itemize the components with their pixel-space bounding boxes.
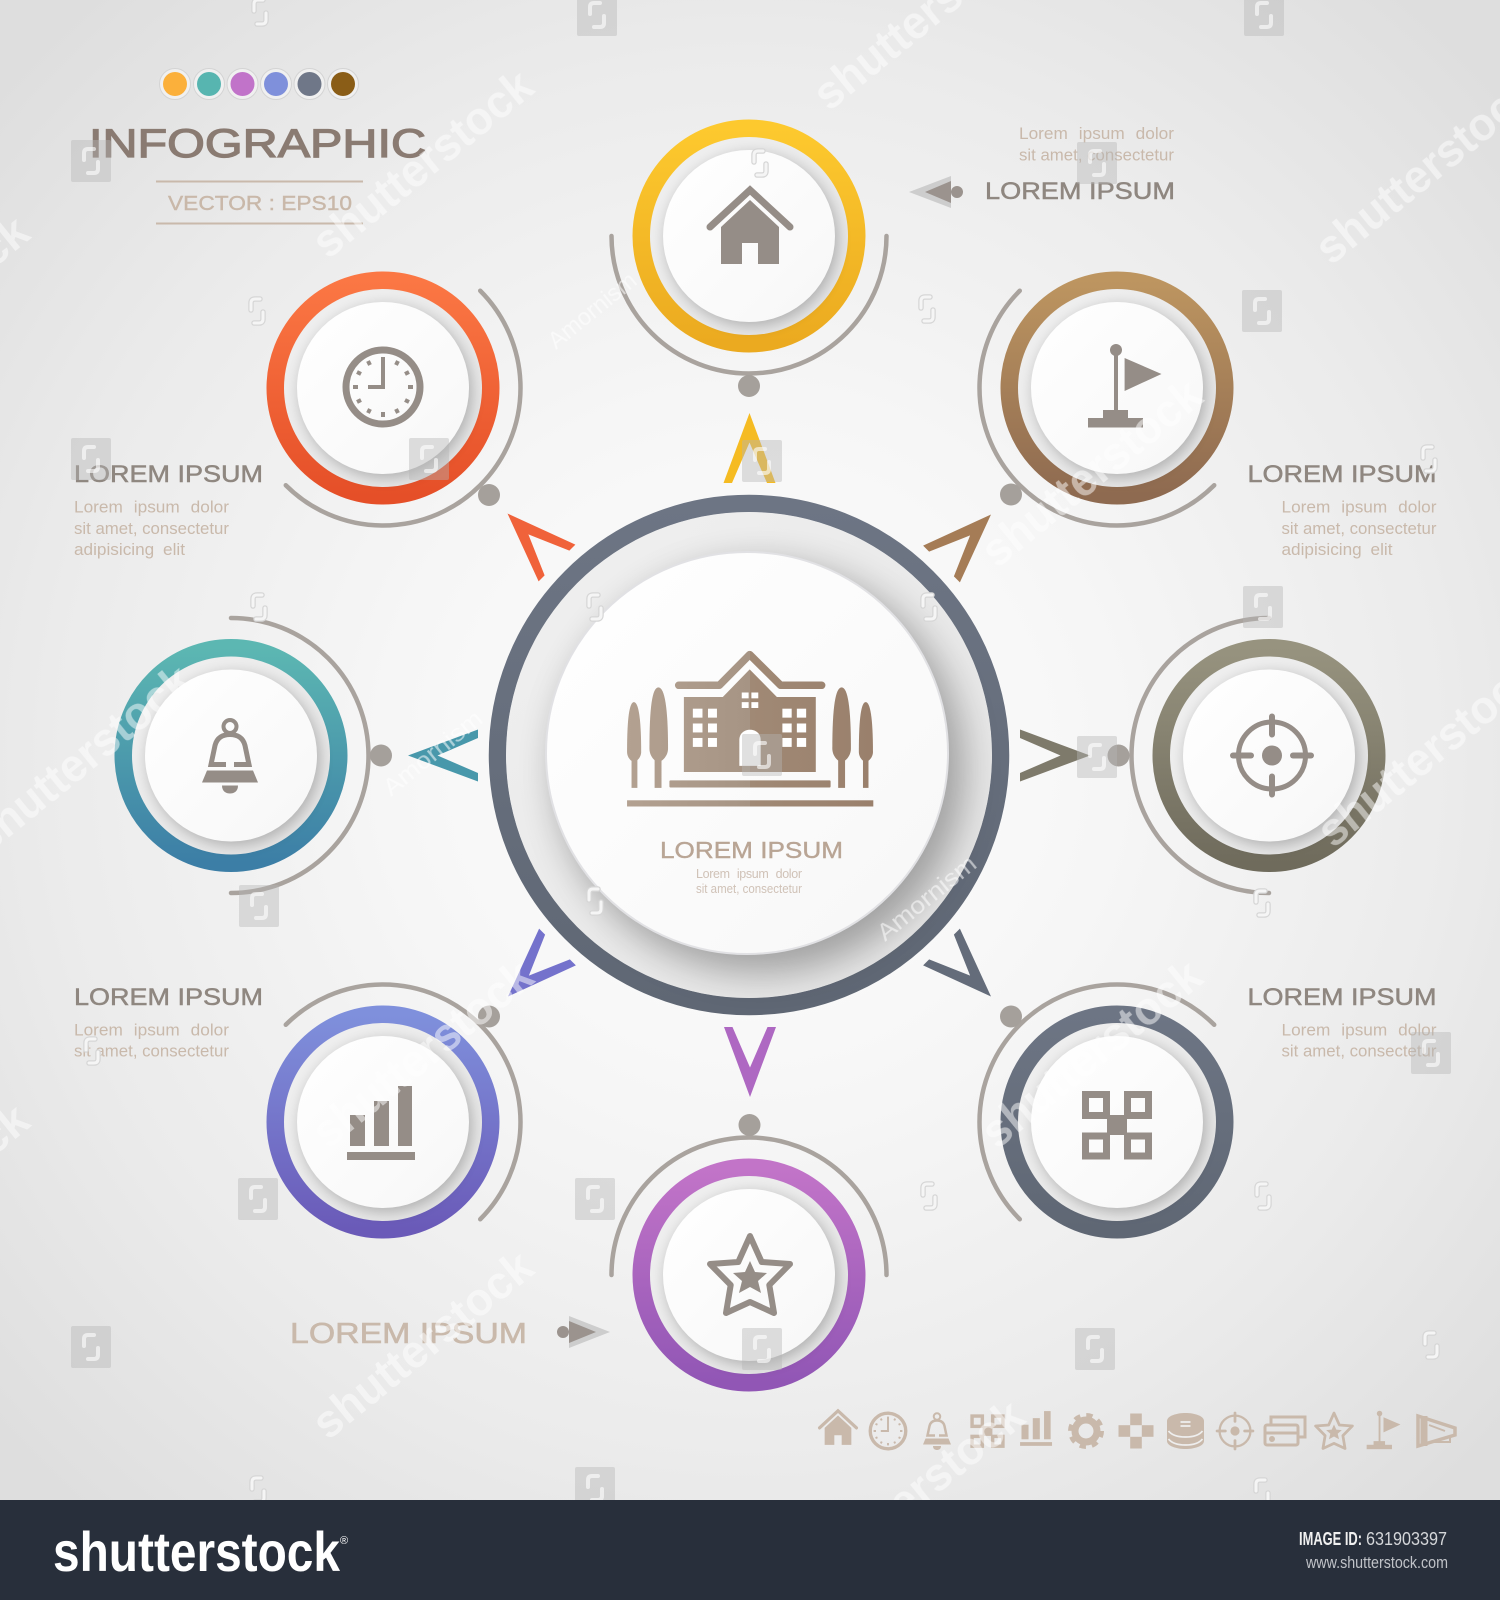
text block: central: Lorem ipsum dolor	[696, 867, 802, 881]
icon: target small	[1217, 1413, 1253, 1449]
watermark overlay: shutterstock	[302, 948, 543, 1158]
footer band	[0, 1500, 1500, 1600]
callout: lower right: LOREM IPSUM	[1248, 984, 1436, 1011]
text block: central	[696, 867, 802, 896]
node: target (olive)	[1162, 648, 1376, 863]
colour palette dots	[160, 68, 358, 100]
heading: central: LOREM IPSUM	[660, 837, 843, 863]
callout: upper right: LOREM IPSUM	[1248, 461, 1436, 488]
node: grid (slate)	[1010, 1014, 1224, 1230]
watermark overlay: shutterstock	[971, 367, 1212, 577]
arrow: upper right	[923, 496, 1009, 582]
arrow: lower left	[490, 929, 576, 1015]
text block: central: sit amet, consectetur	[696, 882, 802, 896]
callout: upper right: adipisicing elit	[1282, 540, 1393, 559]
node: star (purple)	[642, 1168, 856, 1382]
icon: grid small	[972, 1416, 1003, 1446]
callout: upper left: adipisicing elit	[74, 540, 185, 559]
icon: star	[710, 1236, 790, 1313]
node: flag (brown)	[1010, 280, 1224, 496]
icon: flag	[1088, 344, 1162, 428]
title: INFOGRAPHIC	[89, 122, 426, 166]
subtitle: VECTOR : EPS10	[168, 193, 352, 215]
icon row	[820, 1411, 1455, 1450]
arrow: upper left	[489, 495, 575, 581]
icon: bars small	[1020, 1411, 1052, 1446]
arcs and connector dots	[231, 236, 1269, 1275]
icon: school building	[627, 655, 873, 806]
callout: upper right: sit amet, consectetur	[1282, 519, 1437, 538]
callout: upper left	[74, 461, 263, 559]
callout: top: Lorem ipsum dolor	[1019, 124, 1174, 143]
icon: bar chart	[347, 1086, 415, 1160]
icon: target	[1233, 716, 1311, 794]
watermark overlay: shutterstock	[971, 948, 1212, 1158]
icon: cross small	[1118, 1414, 1154, 1448]
watermark overlay: Amornism	[543, 267, 642, 355]
logo: ®	[340, 1535, 348, 1547]
icon: clock	[346, 350, 420, 424]
callout: upper right	[1248, 461, 1437, 559]
callout: lower left: LOREM IPSUM	[74, 984, 263, 1011]
callout: lower right	[1248, 984, 1437, 1060]
watermark overlay: Amornism	[872, 850, 982, 947]
icon: bell small	[923, 1413, 951, 1450]
image id number: 631903397	[1366, 1529, 1447, 1549]
node: home (yellow)	[642, 128, 856, 344]
callout: lower left: Lorem ipsum dolor	[74, 1020, 229, 1040]
callout: upper left: Lorem ipsum dolor	[74, 498, 229, 516]
arrow: left	[408, 730, 478, 782]
website: www.shutterstock.com	[1305, 1554, 1448, 1572]
logo: shutterstock	[53, 1520, 341, 1583]
watermark overlay: shutterstock	[793, 1388, 1034, 1598]
panel: central circle	[498, 504, 1000, 1006]
node: bars (blue)	[276, 1014, 490, 1230]
icon: grid	[1086, 1094, 1148, 1156]
watermark overlay: shutterstock	[302, 58, 543, 268]
callout: upper right: Lorem ipsum dolor	[1282, 498, 1437, 516]
arrow: top	[724, 413, 776, 483]
arrow: bottom	[724, 1027, 776, 1097]
arrow: lower right	[923, 929, 1009, 1015]
icon: coins small	[1167, 1413, 1204, 1449]
icon: flag small	[1367, 1411, 1400, 1449]
callout: bottom	[290, 1316, 610, 1350]
icon: house small	[820, 1411, 856, 1445]
icon: cards small	[1265, 1417, 1305, 1445]
callout: bottom: LOREM IPSUM	[290, 1318, 527, 1350]
icon: clock small	[870, 1413, 906, 1449]
callout: lower right: sit amet, consectetur	[1282, 1042, 1437, 1060]
image id: IMAGE ID:	[1299, 1529, 1362, 1549]
icon: house	[710, 190, 790, 264]
callout: upper left: LOREM IPSUM	[74, 461, 263, 488]
callout: lower left: sit amet, consectetur	[74, 1042, 229, 1060]
watermark overlay: Amornism	[378, 705, 488, 802]
title	[89, 122, 426, 224]
node: clock (orange)	[276, 280, 490, 496]
callout: top: sit amet, consectetur	[1019, 146, 1174, 164]
icon: gear small	[1070, 1416, 1102, 1446]
callout: top: LOREM IPSUM	[985, 178, 1175, 205]
arrow: right	[1020, 730, 1090, 782]
callout: lower right: Lorem ipsum dolor	[1282, 1020, 1437, 1040]
watermark overlay: shutterstock	[302, 1239, 543, 1449]
icon: megaphone small	[1418, 1416, 1455, 1446]
callout: lower left	[74, 984, 263, 1060]
arrow: bottom callout	[557, 1316, 610, 1348]
callout: top	[909, 124, 1175, 208]
icon: bell	[202, 720, 258, 794]
node: bell (teal)	[124, 648, 338, 863]
icon: star small	[1316, 1413, 1352, 1448]
arrow: top callout	[909, 176, 963, 208]
callout: upper left: sit amet, consectetur	[74, 519, 229, 538]
